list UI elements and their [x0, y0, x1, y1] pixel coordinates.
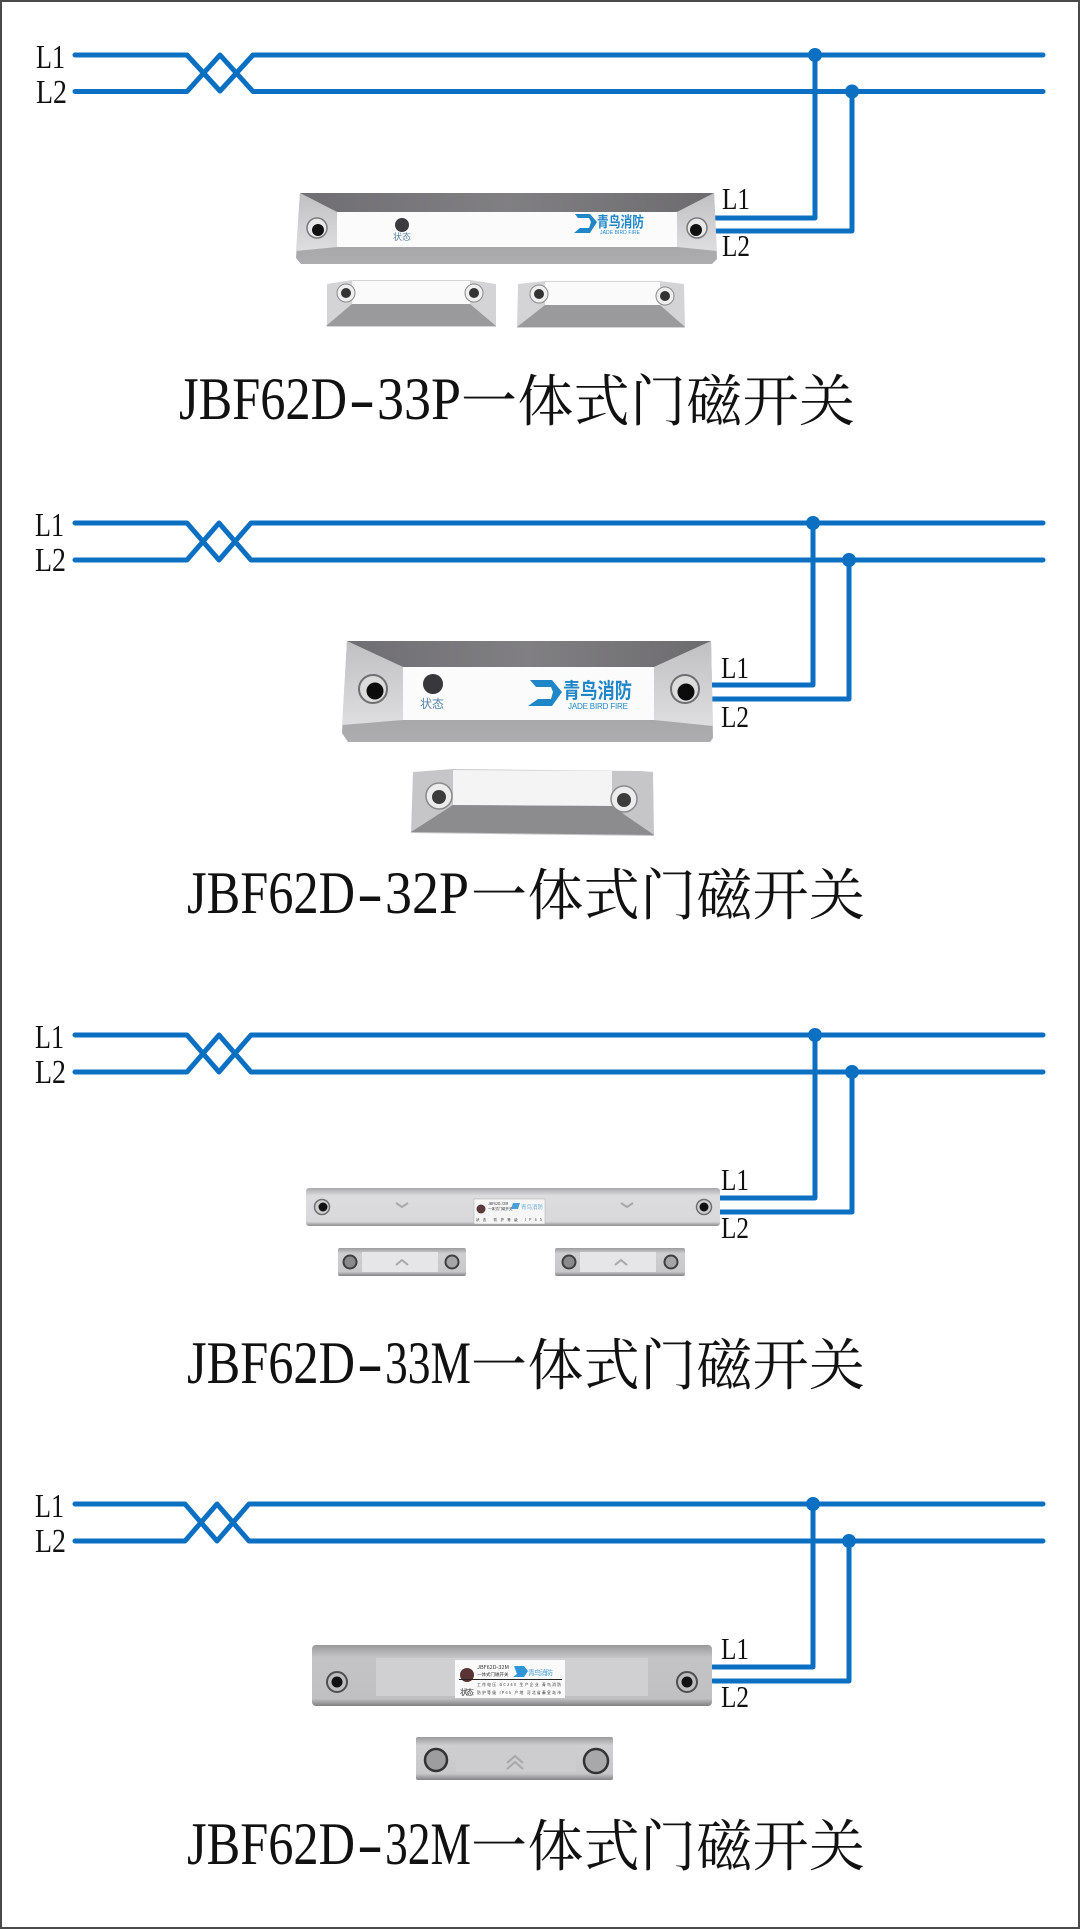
title — [187, 852, 865, 932]
device labels: L2 — [721, 1679, 749, 1714]
brand logo — [574, 211, 644, 236]
device labels — [721, 650, 749, 734]
panel: JBF62D-32P — [35, 507, 1043, 932]
device: main switch body — [296, 193, 717, 264]
title: JBF62D — [187, 1811, 355, 1877]
device labels: L1 — [721, 650, 749, 685]
product label — [474, 1199, 545, 1224]
title: JBF62D — [187, 1330, 355, 1396]
device labels — [721, 1631, 749, 1714]
title: - — [349, 366, 375, 432]
title: 一体式门磁开关 — [471, 1803, 865, 1883]
title: 一体式门磁开关 — [471, 1322, 865, 1402]
bus labels: L2 — [35, 1054, 66, 1091]
title: 33P — [377, 366, 461, 432]
device: magnet — [411, 769, 654, 836]
title: 33M — [385, 1330, 471, 1396]
device labels: L1 — [721, 1162, 749, 1197]
product label: JBF62D-33M — [488, 1202, 508, 1207]
device: magnet left — [326, 280, 496, 327]
bus labels: L2 — [35, 542, 66, 579]
device: main switch body: 状态 — [393, 230, 411, 243]
brand logo: 青鸟消防 — [597, 211, 644, 232]
device: magnet — [416, 1737, 613, 1780]
title: 32M — [385, 1811, 471, 1877]
bus wiring L1 L2 — [75, 1028, 1043, 1212]
product label: 青鸟消防 — [528, 1668, 553, 1678]
device labels: L2 — [721, 1210, 749, 1245]
product label: 状态 — [460, 1687, 474, 1698]
brand logo: 青鸟消防 — [563, 675, 632, 705]
device: magnet right — [555, 1248, 685, 1276]
product label: 一体式门磁开关 — [477, 1671, 509, 1678]
panel: JBF62D-32M — [35, 1488, 1043, 1883]
title: JBF62D — [187, 860, 355, 926]
bus labels: L2 — [36, 74, 67, 111]
product label: 工作电压 DC24V 生产企业 青鸟消防 — [477, 1682, 561, 1688]
product label: 防护等级 IP65 产地 河北省秦皇岛市 — [477, 1690, 561, 1696]
device labels: L2 — [721, 699, 749, 734]
title: 一体式门磁开关 — [471, 852, 865, 932]
bus labels: L1 — [35, 507, 64, 544]
product label — [455, 1660, 565, 1698]
device labels: L1 — [721, 1631, 749, 1666]
title — [187, 1803, 865, 1883]
status LED — [395, 218, 409, 232]
title: JBF62D — [179, 366, 347, 432]
bus labels — [35, 507, 66, 579]
title: 32P — [385, 860, 469, 926]
title: - — [357, 860, 383, 926]
bus labels: L1 — [35, 1019, 64, 1056]
panel: JBF62D-33P — [36, 39, 1043, 438]
device labels — [722, 181, 750, 263]
bus labels — [35, 1019, 66, 1091]
product label: 一体式门磁开关 — [488, 1206, 513, 1212]
device: main switch body: 状态 — [420, 695, 444, 712]
bus wiring L1 L2 — [75, 1497, 1043, 1681]
bus labels — [35, 1488, 66, 1560]
brand logo: JADE BIRD FIRE — [600, 230, 641, 236]
bus labels: L1 — [36, 39, 65, 76]
title: - — [357, 1330, 383, 1396]
product label: 状态 防护等级 IP65 — [476, 1217, 542, 1223]
title — [179, 358, 855, 438]
device: magnet left — [338, 1248, 466, 1276]
device: main switch body — [312, 1645, 712, 1706]
device labels: L1 — [722, 181, 750, 216]
panel: JBF62D-33M — [35, 1019, 1043, 1402]
bus labels — [36, 39, 67, 111]
product label: JBF62D-32M — [477, 1663, 509, 1671]
bus wiring L1 L2 — [75, 48, 1043, 231]
product label: 青鸟消防 — [521, 1203, 543, 1211]
bus labels: L1 — [35, 1488, 64, 1525]
brand logo: JADE BIRD FIRE — [568, 702, 628, 711]
device labels — [721, 1162, 749, 1245]
device labels: L2 — [722, 228, 750, 263]
bus wiring L1 L2 — [75, 516, 1043, 699]
device: magnet right — [517, 281, 685, 328]
title — [187, 1322, 865, 1402]
device: main switch body — [306, 1188, 720, 1226]
device: main switch body — [342, 641, 713, 742]
title: 一体式门磁开关 — [461, 358, 855, 438]
brand logo — [528, 675, 632, 711]
bus labels: L2 — [35, 1523, 66, 1560]
status LED — [423, 674, 443, 694]
title: - — [357, 1811, 383, 1877]
